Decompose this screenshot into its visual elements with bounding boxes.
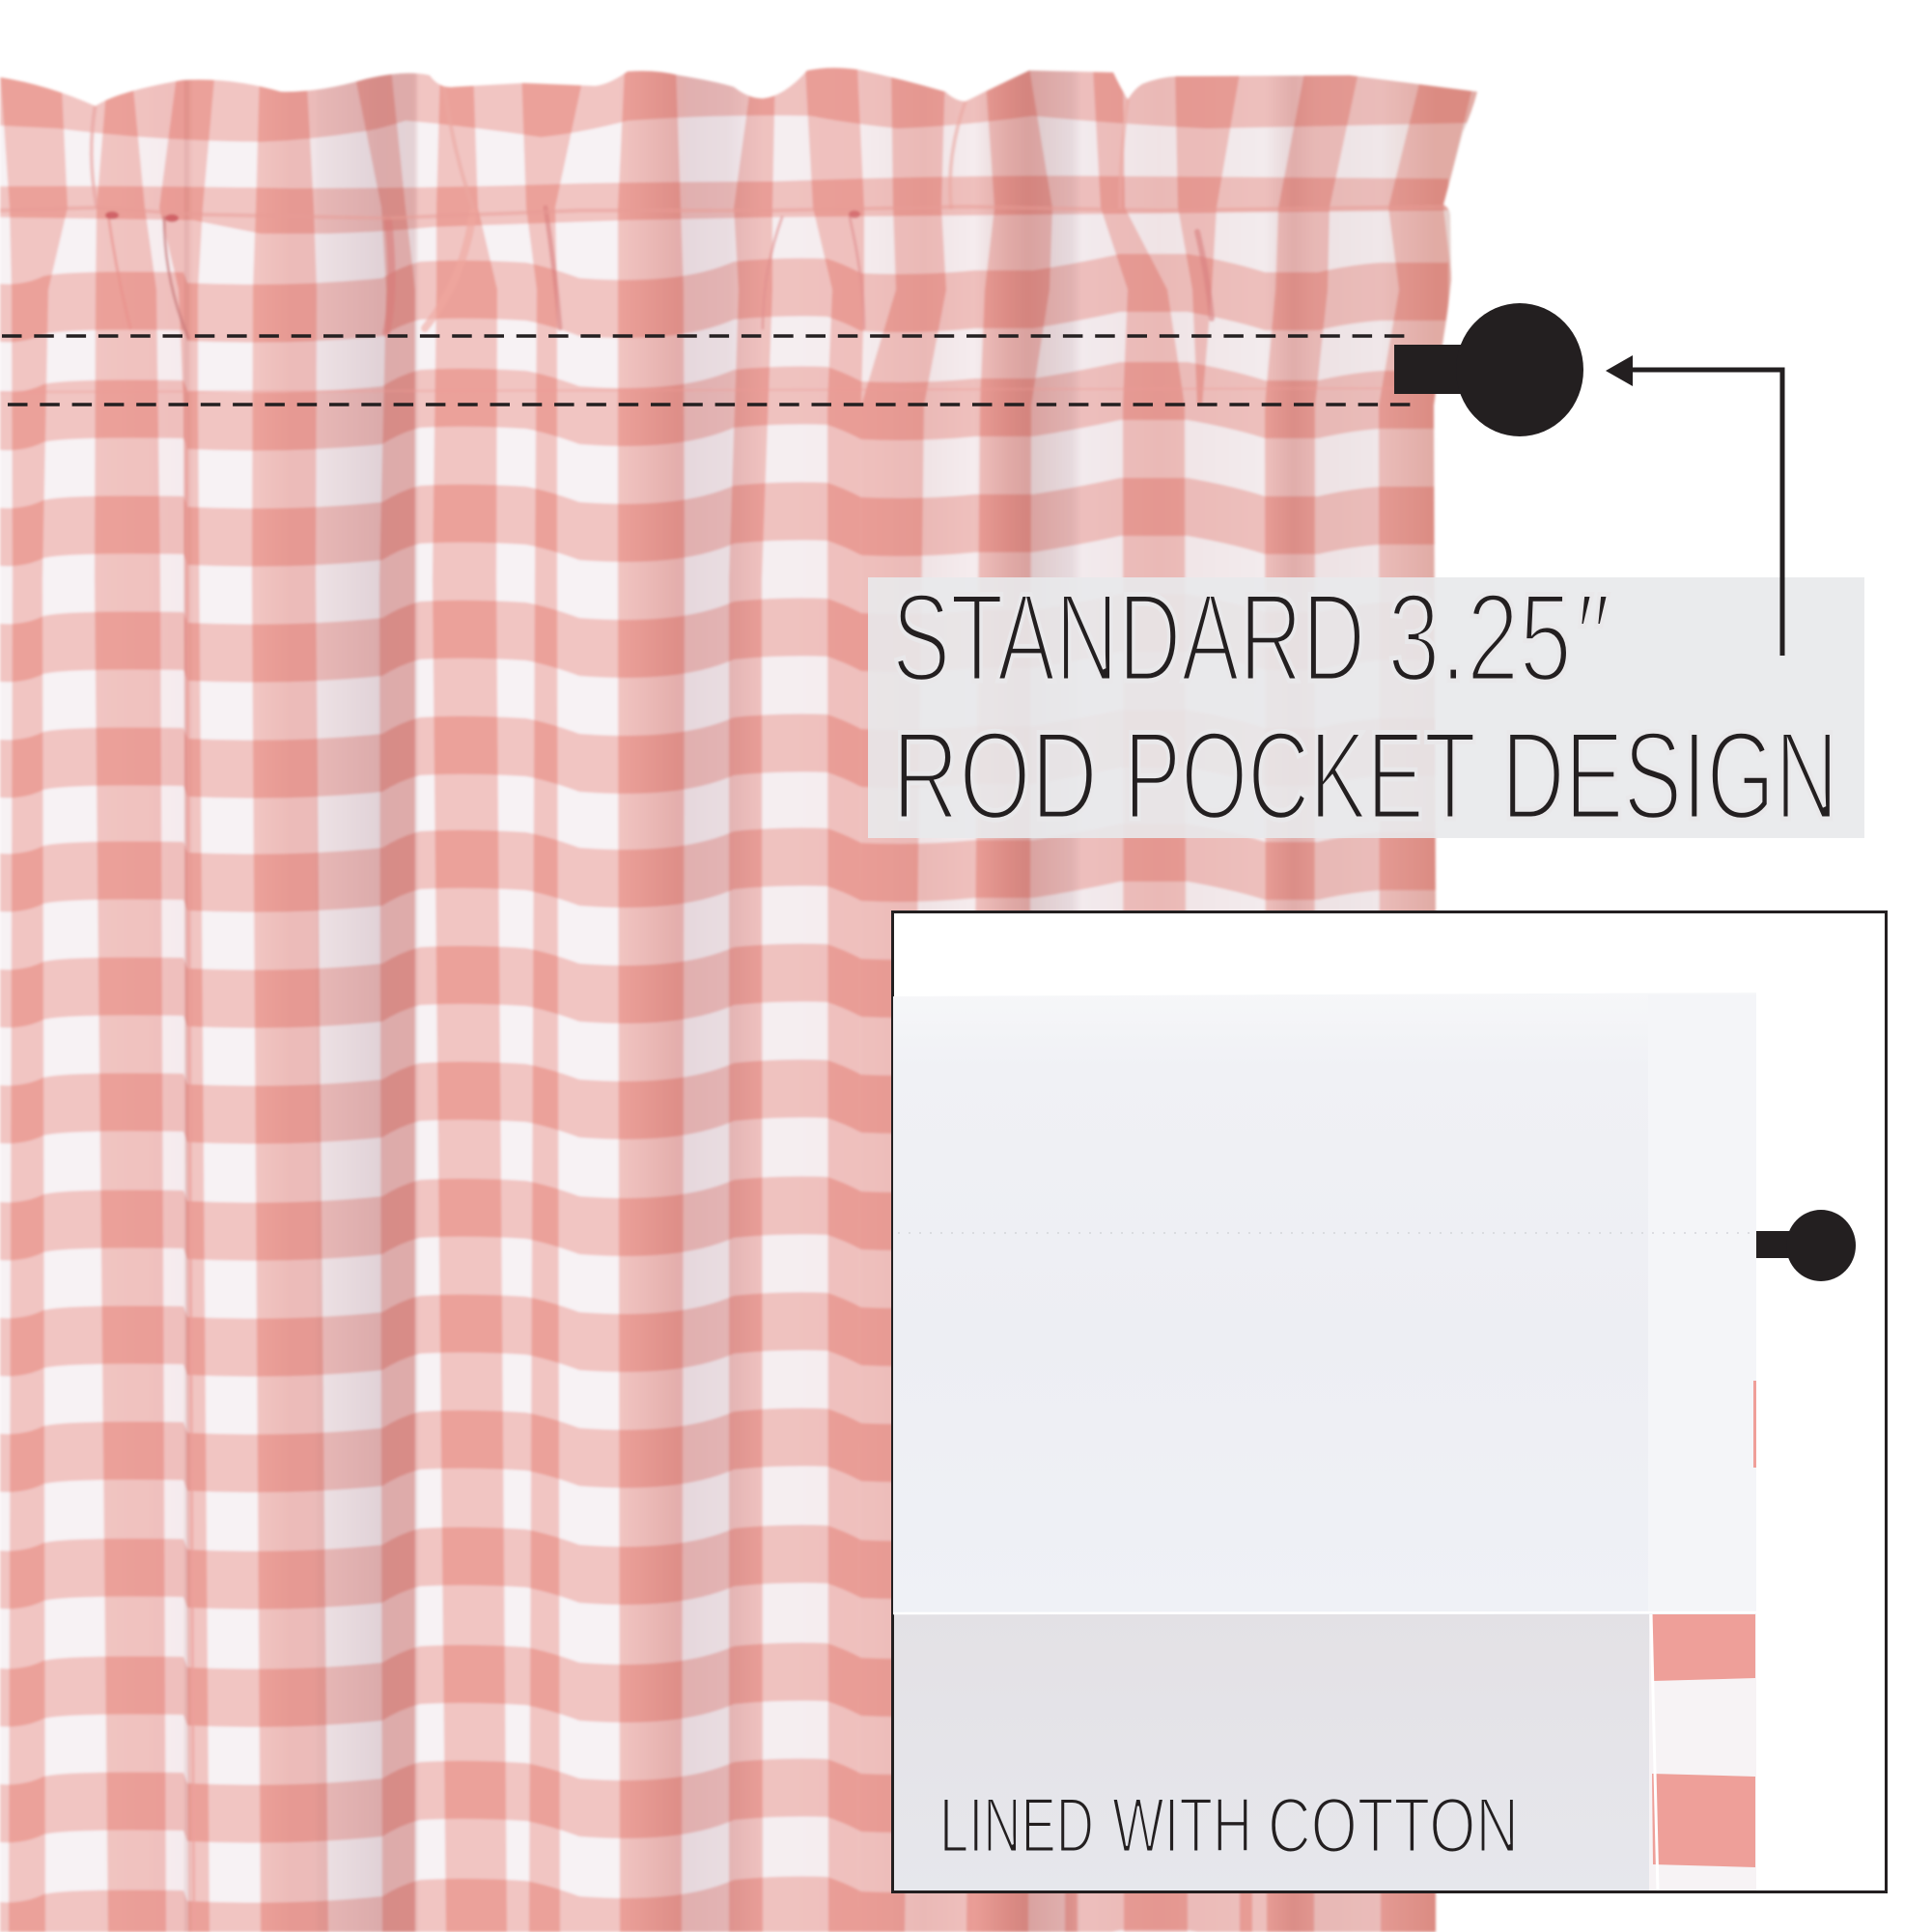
vertical gingham stripes [0,68,1477,1932]
upper lining panel [893,993,1756,1614]
heading line 2: ROD [892,705,1098,846]
heading line 1: ″ [1576,567,1610,708]
lower lining band [894,1612,1652,1890]
callout: rod pocket label [868,567,1864,846]
caption: lined with cotton [939,1782,1519,1869]
heading line 2: POCKET [1124,705,1476,846]
panel: lining inset [892,911,1887,1892]
caption: lined with cotton: LINED [939,1782,1094,1869]
heading line 1: STANDARD [892,567,1365,708]
dashed line: top of rod pocket [2,334,1406,338]
panel: pink gingham curtain photo [0,58,1487,1932]
icon: curtain rod end [1394,303,1583,436]
arrow: label pointing to rod [1606,355,1782,656]
fold edge [893,1612,1756,1613]
icon: small curtain rod end [1752,1210,1856,1281]
fabric fold shading [182,70,1477,1932]
lower hem with pink stripes [1649,1612,1756,1890]
caption: lined with cotton: COTTON [1268,1782,1519,1869]
stitch line [898,1232,1756,1234]
pleat lines and gathers along the rod pocket [0,87,1448,1932]
caption: lined with cotton: WITH [1112,1782,1252,1869]
horizontal gingham stripes [0,58,1487,1932]
heading line 1: 3.25 [1387,567,1572,708]
dashed line: bottom of rod pocket [8,403,1412,406]
heading line 2 [892,705,1838,846]
side hem seam [1648,994,1756,1613]
